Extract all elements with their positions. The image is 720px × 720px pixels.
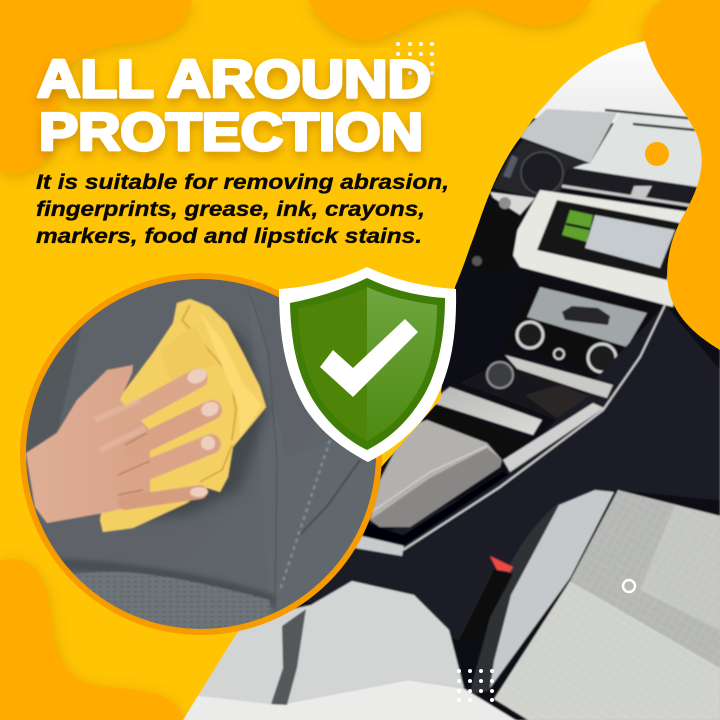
- blob: top centre: [308, 0, 592, 40]
- shield left face: [298, 287, 367, 441]
- windscreen white area: [533, 41, 688, 124]
- bolster dark edge: [470, 503, 559, 695]
- console centre band: [430, 387, 542, 435]
- dashboard slit: [605, 110, 697, 130]
- console strip: [505, 355, 613, 398]
- yellow cloth: [100, 299, 266, 532]
- orange ring: [20, 273, 382, 635]
- cup holder: [427, 405, 523, 457]
- climate touchscreen: [527, 287, 647, 347]
- description text: markers, food and lipstick stains.: [36, 225, 422, 248]
- climate control housing: [504, 280, 659, 370]
- screen bezel: [508, 190, 690, 307]
- finger nails: [185, 366, 221, 497]
- shield right face: [367, 287, 437, 441]
- gear tray: [460, 362, 590, 420]
- right seat bolster: [490, 490, 614, 688]
- orange dot: [645, 142, 669, 166]
- front seat cushion: [165, 680, 532, 720]
- right bolster: [248, 280, 380, 620]
- check mark: [320, 319, 418, 397]
- title: PROTECTION: [39, 103, 423, 162]
- title: [37, 50, 431, 162]
- armrest black base: [360, 472, 510, 545]
- front seat dark strip: [271, 609, 306, 705]
- blob: right side: [644, 0, 720, 360]
- left seat panel: [26, 328, 81, 452]
- cloth shadow: [140, 315, 268, 520]
- blob: top left: [0, 0, 192, 173]
- chrome base: [355, 535, 404, 556]
- right seat backrest: [570, 490, 720, 670]
- decorative dots: top: [396, 42, 434, 75]
- lower dark panel: [300, 305, 720, 640]
- shield outer green: [290, 278, 445, 450]
- seat base: [26, 279, 376, 596]
- instrument cluster: [493, 140, 587, 197]
- shield white outline: [279, 267, 456, 462]
- right seat cushion: [494, 581, 720, 720]
- description text: [36, 171, 449, 248]
- steering column: [470, 197, 520, 272]
- seat belt buckle: [459, 556, 513, 640]
- shield icon with check mark: [279, 267, 456, 462]
- chrome trim line: [403, 305, 665, 550]
- title: ALL AROUND: [37, 50, 431, 109]
- stitching: [280, 440, 330, 590]
- ring marker: [623, 580, 635, 592]
- description text: It is suitable for removing abrasion,: [36, 171, 449, 194]
- description text: fingerprints, grease, ink, crayons,: [36, 198, 425, 221]
- console silver trim: [503, 403, 604, 472]
- left panel beside screen: [490, 192, 535, 215]
- mesh cushion: [70, 572, 270, 640]
- climate knobs: [517, 322, 616, 372]
- air vent: [562, 168, 705, 207]
- front seat bolster: [180, 581, 464, 705]
- armrest: [370, 420, 502, 527]
- dashboard top panel: [520, 109, 617, 163]
- infotainment screen: [537, 200, 680, 280]
- hand: [26, 365, 221, 523]
- dashboard right panel: [572, 113, 702, 188]
- decorative dots: bottom: [457, 669, 494, 702]
- circular photo: hand wiping seat: [20, 270, 385, 640]
- seat shadow band: [40, 558, 275, 607]
- blob: bottom left: [0, 559, 184, 720]
- car interior photo: [160, 30, 720, 720]
